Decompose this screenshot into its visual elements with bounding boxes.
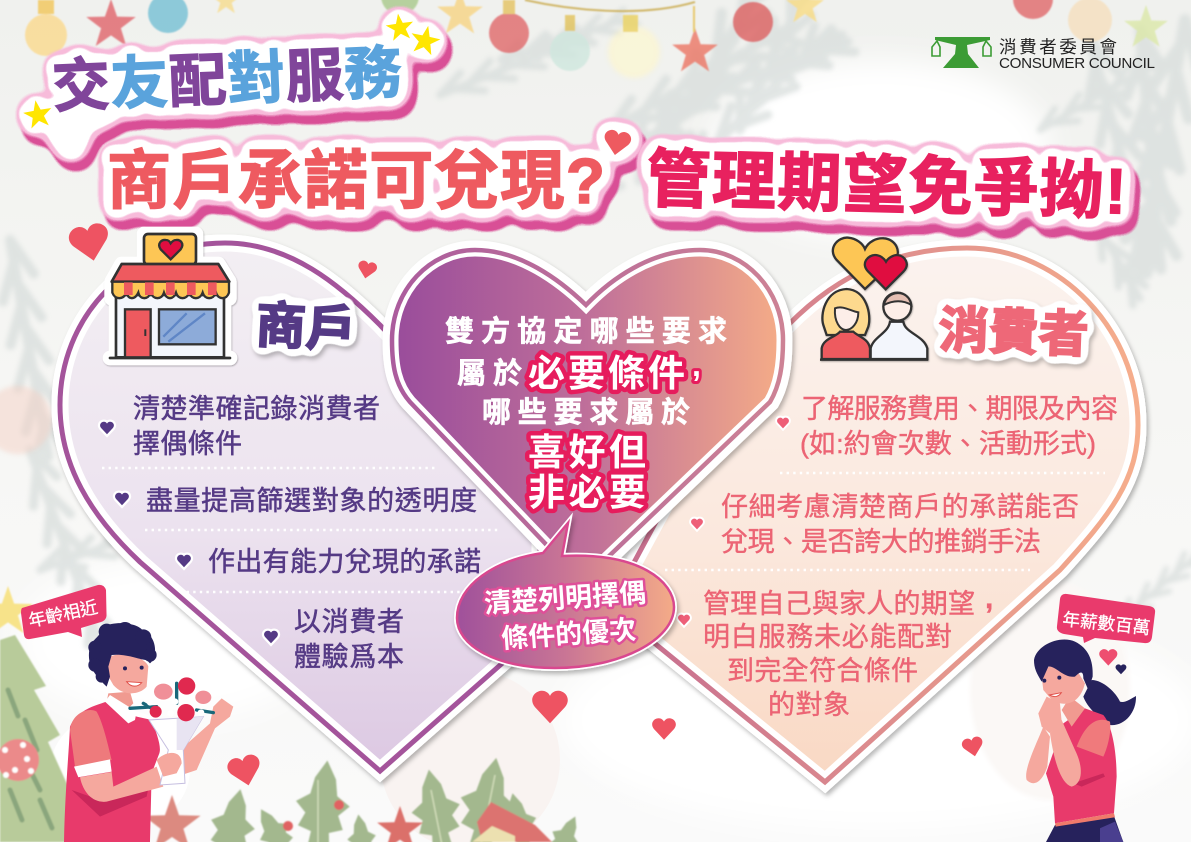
heading: consumer: 消費者	[938, 302, 1089, 363]
bullet 4: 體驗爲本	[294, 642, 404, 672]
icon: couple with hearts	[820, 238, 928, 360]
text block: merchant points	[100, 394, 481, 672]
panel: consumer heart	[610, 248, 1138, 782]
icon: shop	[110, 234, 230, 358]
callout: age tag: 年齡相近	[27, 597, 100, 631]
bullet 2: 兌現、是否誇大的推銷手法	[721, 527, 1041, 557]
callout: priority bubble: 清楚列明擇偶	[483, 578, 647, 619]
bullet 4	[264, 607, 404, 672]
bullet 1: (如:約會次數、活動形式)	[800, 429, 1096, 459]
ornaments and lights	[25, 0, 1168, 78]
bullet 1	[100, 394, 380, 459]
callout: salary tag: 年薪數百萬	[1062, 609, 1151, 638]
text block: central heart: 喜好但	[528, 432, 646, 473]
logo chinese name: 消費者委員會	[999, 37, 1117, 57]
callout: priority bubble: 條件的優次	[500, 615, 637, 654]
heading: main title left: 商戶承諾可兌現?	[107, 145, 605, 217]
bullet 3: ,	[985, 582, 993, 615]
bullet 3: 管理自己與家人的期望	[703, 589, 975, 619]
floating hearts	[67, 221, 985, 789]
text block: central heart: 屬於	[457, 357, 522, 390]
panel: merchant heart	[60, 243, 540, 771]
illustration: man with bouquet	[64, 622, 233, 842]
heading: main title right: 管理期望免爭拗!	[646, 143, 1127, 228]
text block: central heart: 非必要	[528, 472, 646, 513]
text block: central heart	[445, 315, 727, 513]
bullet 2: 盡量提高篩選對象的透明度	[146, 486, 477, 516]
text block: central heart: 必要條件	[528, 353, 685, 394]
bullet 4: 以消費者	[294, 607, 404, 637]
christmas tree	[0, 586, 72, 842]
text block: consumer points	[678, 394, 1118, 720]
text block: central heart: 哪些要求屬於	[482, 396, 690, 429]
callout: salary tag	[1057, 594, 1155, 643]
callout: priority bubble	[457, 523, 674, 668]
bullet 3: 的對象	[768, 690, 850, 720]
holly and gift decoration	[143, 753, 588, 842]
heading: merchant: 商戶	[254, 297, 357, 358]
bullet 1: 清楚準確記錄消費者	[133, 394, 380, 424]
text block: central heart: 雙方協定哪些要求	[445, 315, 727, 348]
logo: consumer council	[932, 37, 1155, 72]
logo emblem	[932, 37, 991, 68]
bullet 2	[691, 492, 1079, 557]
bullet 1: 了解服務費用、期限及內容	[801, 394, 1118, 424]
illustration: woman	[1026, 640, 1136, 842]
banner tail	[45, 108, 120, 153]
bullet 3: 到完全符合條件	[727, 656, 918, 686]
title stars	[21, 12, 443, 129]
icon: title heart	[602, 129, 632, 157]
logo english name: CONSUMER COUNCIL	[999, 55, 1155, 72]
bullet 2: 仔細考慮清楚商戶的承諾能否	[721, 492, 1079, 522]
panel: central heart	[392, 250, 783, 582]
bullet 1	[777, 394, 1118, 459]
bullet 3	[678, 582, 993, 720]
bullet 3: 作出有能力兌現的承諾	[208, 547, 481, 577]
service title: 交友配對服務	[51, 40, 403, 120]
text block: central heart: ,	[692, 347, 701, 383]
bullet 3: 明白服務未必能配對	[703, 622, 952, 652]
heading: service title banner	[21, 12, 443, 153]
bullet 1: 擇偶條件	[133, 429, 242, 459]
callout: age tag	[21, 585, 107, 639]
